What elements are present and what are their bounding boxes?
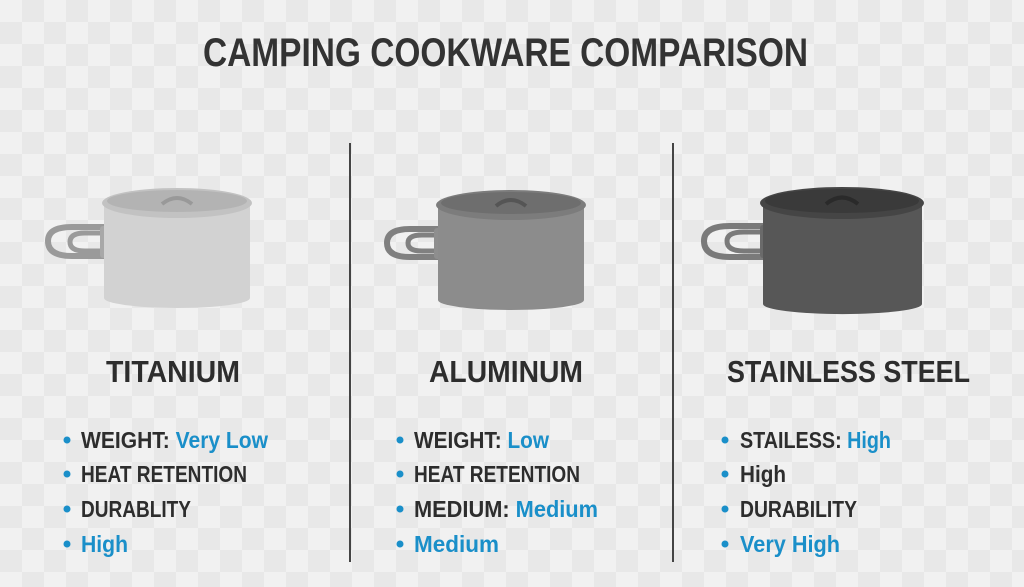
list: stainless steel: Very High <box>740 531 840 557</box>
list: titanium <box>64 427 268 557</box>
heading: stainless steel: STAINLESS STEEL <box>727 354 970 389</box>
icon: titanium pot <box>48 188 252 308</box>
list: titanium: HEAT RETENTION <box>81 461 247 487</box>
list: stainless steel <box>722 427 891 557</box>
heading: titanium: TITANIUM <box>106 354 240 389</box>
list: stainless steel: High <box>740 461 786 487</box>
list: stainless steel: DURABILITY <box>740 496 857 522</box>
panel: titanium <box>48 188 268 557</box>
icon: aluminum pot <box>387 190 586 310</box>
icon: stainless pot <box>704 187 924 314</box>
list: aluminum: HEAT RETENTION <box>414 461 580 487</box>
list: aluminum: WEIGHT: Low <box>414 427 549 453</box>
list: titanium: High <box>81 531 128 557</box>
panel: aluminum <box>387 190 598 557</box>
list: aluminum <box>396 427 598 557</box>
heading: aluminum: ALUMINUM <box>429 354 583 389</box>
list: titanium: DURABLITY <box>81 496 191 522</box>
title: CAMPING COOKWARE COMPARISON <box>203 31 808 75</box>
list: titanium: WEIGHT: Very Low <box>81 427 268 453</box>
list: aluminum: MEDIUM: Medium <box>414 496 598 522</box>
panel: stainless steel <box>704 187 970 557</box>
list: stainless steel: STAILESS: High <box>740 427 891 453</box>
list: aluminum: Medium <box>414 531 499 557</box>
